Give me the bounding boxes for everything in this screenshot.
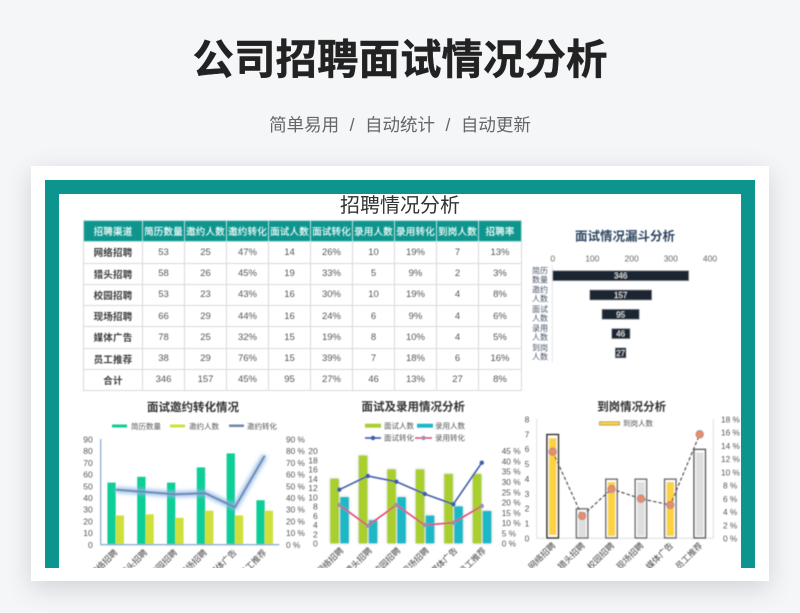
right axis labels: 6 % [723, 494, 738, 504]
right axis labels: 0 % [723, 534, 738, 544]
left axis labels: 6 [525, 444, 530, 454]
funnel category labels: 数量 [532, 274, 548, 284]
table: recruitment channels: 6 [371, 311, 376, 322]
right axis labels: 25 % [502, 487, 521, 497]
right axis labels: 2 % [723, 520, 738, 530]
table: recruitment channels: 76% [238, 353, 257, 364]
table: recruitment channels: 现场招聘 [94, 312, 132, 323]
funnel values: 157 [614, 291, 628, 300]
category labels: 猎头招聘 [556, 540, 587, 571]
chart: interview and hiring [308, 400, 521, 576]
table: recruitment channels [82, 220, 522, 392]
right axis labels: 60 % [286, 470, 306, 480]
line: onboarding rate [549, 430, 704, 520]
legend: chart 2: 面试转化 [384, 432, 414, 442]
table: recruitment channels: 媒体广告 [94, 333, 132, 344]
table: recruitment channels: 8% [493, 374, 507, 385]
table: recruitment channels: 2 [455, 268, 460, 279]
funnel category labels: 邀约 [532, 284, 548, 294]
right axis labels: 10 % [502, 518, 521, 528]
right axis labels: 10 % [286, 528, 306, 538]
table: recruitment channels: 5% [493, 332, 507, 343]
right axis labels: 20 % [502, 498, 521, 508]
table: recruitment channels: 8% [493, 289, 507, 300]
left axis labels: 0 [525, 534, 530, 544]
funnel category labels: 人数 [532, 294, 548, 304]
table: recruitment channels: 24% [322, 311, 341, 322]
table: recruitment channels: 面试人数 [270, 227, 309, 238]
chart: onboarding [525, 400, 741, 571]
table: recruitment channels: 39% [322, 353, 341, 364]
bars: resumes [107, 453, 265, 545]
category labels: 网络招聘 [526, 540, 558, 571]
bars: invited [116, 511, 273, 545]
line glow [116, 456, 265, 507]
legend: chart 1: 邀约人数 [189, 421, 219, 431]
funnel values: 346 [614, 272, 628, 281]
funnel category labels [532, 266, 548, 362]
right axis labels: 8 % [723, 481, 738, 491]
table: recruitment channels: 26 [200, 268, 211, 279]
legend: chart 3: 到岗人数 [623, 418, 653, 428]
funnel category labels: 人数 [532, 332, 548, 342]
table: recruitment channels: 346 [156, 374, 171, 385]
funnel values [614, 272, 628, 358]
right axis labels: 70 % [286, 458, 306, 468]
legend: chart 1 [112, 421, 277, 431]
right axis labels: 35 % [502, 467, 521, 477]
category labels: 媒体广告 [644, 540, 675, 571]
right axis labels [286, 434, 306, 550]
category labels: 校园招聘 [148, 547, 179, 578]
table: recruitment channels: 27 [452, 374, 463, 385]
table: recruitment channels: 面试转化 [312, 227, 351, 238]
panel: teal frame [45, 180, 755, 568]
heading: chart 2: 面试及录用情况分析 [362, 400, 466, 414]
category labels [527, 541, 702, 568]
table: recruitment channels: 157 [198, 374, 213, 385]
funnel values: 95 [616, 310, 626, 319]
left axis labels: 10 [308, 492, 318, 502]
left axis labels: 20 [83, 516, 93, 526]
table: recruitment channels: 29 [200, 311, 211, 322]
table: recruitment channels: 10% [406, 332, 425, 343]
left axis labels: 40 [83, 493, 93, 503]
category labels: 现场招聘 [178, 547, 209, 578]
table: recruitment channels: 19 [284, 268, 295, 279]
funnel category labels: 面试 [532, 304, 548, 314]
bars: fills [549, 438, 703, 536]
heading: funnel: 面试情况漏斗分析 [575, 228, 675, 244]
table: recruitment channels: 校园招聘 [94, 291, 132, 302]
table: recruitment channels: 4 [455, 332, 460, 343]
table: recruitment channels: 32% [238, 332, 257, 343]
table: recruitment channels: 66 [158, 311, 169, 322]
table: recruitment channels: 6% [493, 311, 507, 322]
right axis labels: 30 % [286, 505, 306, 515]
left axis labels: 2 [525, 504, 530, 514]
right axis labels: 4 % [723, 507, 738, 517]
line: hiring conversion [337, 503, 484, 528]
category labels: 现场招聘 [400, 545, 431, 576]
table: recruitment channels: 4 [455, 289, 460, 300]
table: recruitment channels: 7 [455, 247, 460, 258]
left axis labels: 30 [83, 505, 93, 515]
right axis labels: 90 % [286, 434, 306, 444]
title: 公司招聘面试情况分析 [192, 36, 608, 83]
table: recruitment channels: 8 [371, 332, 376, 343]
right axis labels: 14 % [721, 441, 741, 451]
legend: chart 2: 录用人数 [435, 420, 465, 430]
table: recruitment channels: 5 [371, 268, 376, 279]
table: recruitment channels: 10 [368, 289, 379, 300]
table: recruitment channels: 网络招聘 [94, 248, 132, 259]
table: recruitment channels: 25 [200, 247, 211, 258]
table: recruitment channels: 3% [493, 268, 507, 279]
right axis labels: 5 % [502, 528, 517, 538]
table: recruitment channels: 23 [200, 289, 211, 300]
table: recruitment channels: 4 [455, 311, 460, 322]
panel: card background [31, 166, 769, 581]
table: recruitment channels: 14 [284, 247, 295, 258]
funnel category labels: 到岗 [532, 344, 548, 352]
heading: sheet title: 招聘情况分析 [340, 195, 460, 217]
funnel axis labels: 300 [664, 254, 678, 264]
left axis labels: 8 [313, 502, 318, 512]
category labels: 校园招聘 [371, 545, 403, 576]
right axis labels [502, 446, 521, 548]
table: recruitment channels: 13% [490, 247, 510, 258]
table: recruitment channels: 30% [322, 289, 341, 300]
category labels: 媒体广告 [207, 547, 239, 578]
table: recruitment channels: 46 [368, 374, 379, 385]
left axis labels: 14 [308, 474, 318, 484]
table: recruitment channels: 47% [238, 247, 257, 258]
left axis labels [83, 434, 93, 550]
table: recruitment channels: 招聘渠道 [94, 227, 132, 238]
right axis labels [721, 414, 741, 544]
table: recruitment channels: 18% [406, 353, 425, 364]
table: recruitment channels: 78 [158, 332, 169, 343]
left axis labels: 0 [88, 540, 93, 550]
right axis labels: 10 % [721, 467, 741, 477]
funnel category labels: 录用 [532, 324, 548, 333]
table: recruitment channels: 53 [158, 289, 169, 300]
table: recruitment channels: 6 [455, 353, 460, 364]
table: recruitment channels: 19% [406, 289, 425, 300]
table: recruitment channels: 19% [406, 247, 425, 258]
table: recruitment channels: 招聘率 [485, 227, 515, 238]
funnel axis labels: 0 [550, 254, 555, 264]
table: recruitment channels: 录用转化 [396, 227, 435, 238]
table: recruitment channels: 7 [371, 353, 376, 364]
right axis labels: 15 % [502, 508, 521, 518]
table: recruitment channels: 16 [284, 311, 295, 322]
left axis labels: 10 [83, 528, 93, 538]
legend: chart 2 [365, 420, 465, 442]
table: recruitment channels: 33% [322, 268, 341, 279]
axes [101, 439, 279, 545]
funnel axis labels: 400 [703, 254, 717, 264]
table: recruitment channels: 10 [368, 247, 379, 258]
left axis labels: 4 [525, 474, 530, 484]
left axis labels: 60 [83, 470, 93, 480]
table: recruitment channels: 26% [322, 247, 341, 258]
right axis labels: 50 % [286, 481, 306, 491]
left axis labels: 3 [525, 489, 530, 499]
left axis labels: 20 [308, 446, 318, 456]
funnel bars [553, 271, 689, 358]
table: recruitment channels: 16 [284, 289, 295, 300]
bars: outlines [547, 435, 705, 538]
table: recruitment channels: 猎头招聘 [94, 270, 132, 281]
funnel values: 27 [616, 349, 626, 358]
category labels: 网络招聘 [314, 545, 346, 576]
left axis labels: 80 [83, 446, 93, 456]
table: recruitment channels: 15 [284, 353, 295, 364]
table: recruitment channels: 53 [158, 247, 169, 258]
category labels: 猎头招聘 [343, 545, 374, 576]
line: invitation conversion [116, 456, 265, 507]
table: recruitment channels: 录用人数 [354, 227, 393, 238]
category labels: 网络招聘 [88, 547, 120, 578]
legend: chart 2: 录用转化 [435, 432, 465, 442]
table: recruitment channels: 员工推荐 [94, 355, 132, 366]
right axis labels: 12 % [721, 454, 741, 464]
table: recruitment channels: 9% [409, 268, 422, 279]
table: recruitment channels: 38 [158, 353, 169, 364]
category labels [316, 546, 486, 568]
legend: chart 3 [600, 418, 653, 428]
table: recruitment channels: 简历数量 [144, 227, 183, 238]
left axis labels: 90 [83, 434, 93, 444]
table: recruitment channels: 16% [490, 353, 510, 364]
left axis labels: 5 [525, 459, 530, 469]
table: recruitment channels: 9% [409, 311, 422, 322]
left axis labels: 18 [308, 455, 318, 465]
left axis labels: 1 [525, 519, 530, 529]
legend: chart 1: 简历数量 [131, 421, 161, 431]
heading: chart 3: 到岗情况分析 [597, 400, 667, 414]
table: recruitment channels: 邀约人数 [186, 227, 225, 238]
category labels: 员工推荐 [673, 540, 705, 571]
left axis labels: 4 [313, 520, 318, 530]
left axis labels: 2 [313, 529, 318, 539]
table: recruitment channels: 19% [322, 332, 341, 343]
chart: invitation conversion [83, 400, 306, 578]
left axis labels [525, 414, 530, 544]
table: recruitment channels: 13% [406, 374, 425, 385]
right axis labels: 80 % [286, 446, 306, 456]
right axis labels: 16 % [721, 428, 741, 438]
subtitle: 简单易用 / 自动统计 / 自动更新 [269, 115, 531, 135]
table: recruitment channels: 15 [284, 332, 295, 343]
left axis labels: 8 [525, 414, 530, 424]
funnel category labels: 人数 [532, 352, 548, 362]
category labels [92, 548, 266, 568]
category labels: 校园招聘 [585, 540, 617, 571]
table: recruitment channels: 43% [238, 289, 257, 300]
category labels: 现场招聘 [614, 540, 646, 571]
table: recruitment channels: 95 [284, 374, 295, 385]
left axis labels: 6 [313, 511, 318, 521]
legend: chart 1: 邀约转化 [247, 421, 277, 431]
left axis labels: 50 [83, 481, 93, 491]
left axis labels [308, 446, 318, 548]
panel: sheet inner area [59, 194, 741, 568]
table: recruitment channels: 25 [200, 332, 211, 343]
table: recruitment channels: 44% [238, 311, 257, 322]
right axis labels: 40 % [502, 456, 521, 466]
table: recruitment channels: 27% [322, 374, 341, 385]
category labels: 员工推荐 [457, 545, 488, 576]
right axis labels: 0 % [286, 540, 301, 550]
right axis labels: 0 % [502, 538, 517, 548]
funnel values: 46 [616, 330, 626, 339]
table: recruitment channels: 45% [238, 374, 257, 385]
funnel category labels: 简历 [532, 266, 548, 276]
left axis labels: 70 [83, 458, 93, 468]
right axis labels: 40 % [286, 493, 306, 503]
table: recruitment channels: 29 [200, 353, 211, 364]
chart: funnel analysis [532, 228, 717, 362]
legend: chart 2: 面试人数 [384, 420, 414, 430]
category labels: 媒体广告 [428, 545, 459, 576]
table: recruitment channels: 到岗人数 [438, 227, 477, 238]
charts layer [82, 228, 740, 568]
line: interview conversion [337, 460, 484, 506]
right axis labels: 18 % [721, 414, 741, 424]
right axis labels: 45 % [502, 446, 521, 456]
bars: interviewed [330, 456, 481, 543]
right axis labels: 30 % [502, 477, 521, 487]
funnel axis labels: 200 [625, 254, 639, 264]
funnel axis labels [550, 254, 717, 264]
table: recruitment channels: 45% [238, 268, 257, 279]
category labels: 猎头招聘 [118, 547, 150, 578]
left axis labels: 16 [308, 465, 318, 475]
table: recruitment channels: 58 [158, 268, 169, 279]
bars: hired [340, 497, 491, 543]
table: recruitment channels: 邀约转化 [228, 227, 267, 238]
left axis labels: 12 [308, 483, 318, 493]
left axis labels: 0 [313, 538, 318, 548]
axes [537, 419, 713, 538]
funnel category labels: 人数 [532, 313, 548, 323]
right axis labels: 20 % [286, 516, 306, 526]
category labels: 员工推荐 [237, 547, 269, 578]
heading: chart 1: 面试邀约转化情况 [147, 400, 239, 414]
table: recruitment channels: 合计 [103, 376, 123, 387]
funnel axis labels: 100 [585, 254, 600, 264]
left axis labels: 7 [525, 429, 530, 439]
